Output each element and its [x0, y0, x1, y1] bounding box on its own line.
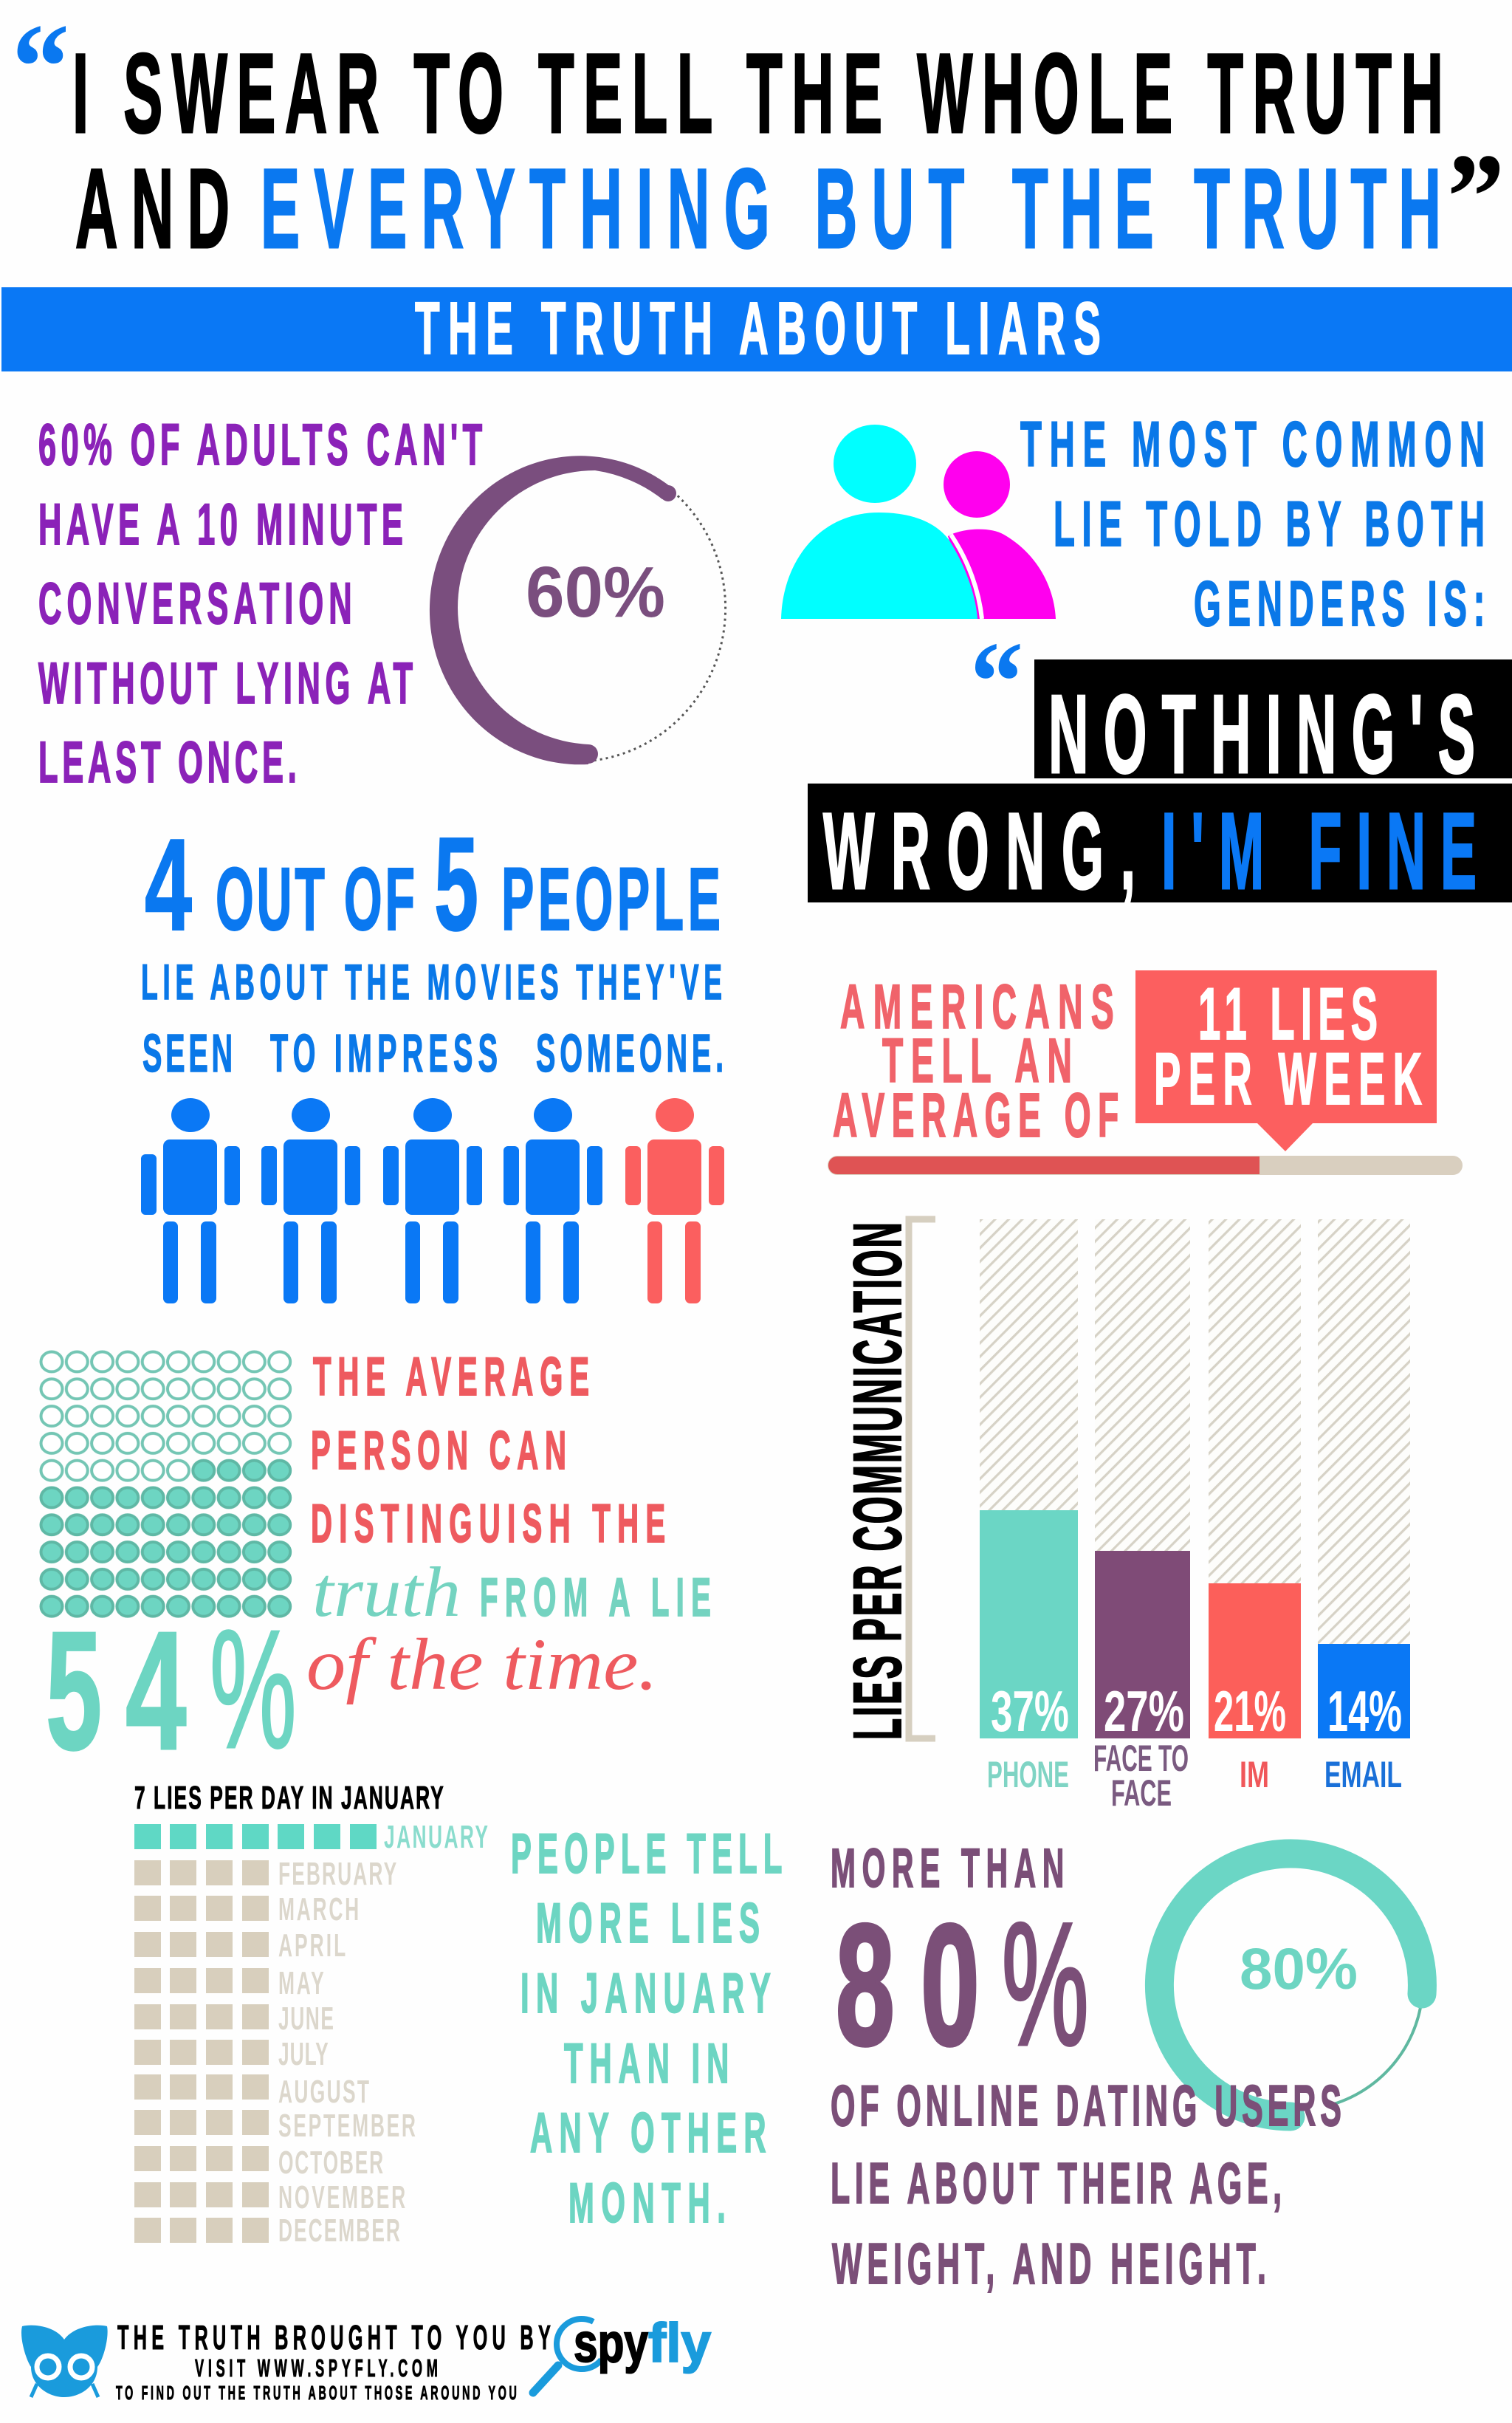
quote: nothing's wrong: I'M FINE	[1161, 790, 1477, 912]
text: americans tell an average of	[833, 973, 1118, 1151]
month labels: JUNE	[278, 2000, 334, 2037]
callout: 11 lies per week	[1135, 970, 1437, 1151]
quote: nothing's wrong	[808, 659, 1512, 912]
subtitle banner: THE TRUTH ABOUT LIARS	[415, 288, 1101, 370]
callout: 11 lies per week: 11 LIES	[1198, 973, 1378, 1055]
bar: phone: 37%	[991, 1679, 1069, 1744]
month labels: JULY	[278, 2035, 329, 2072]
text: americans tell an average of: AVERAGE OF	[833, 1082, 1118, 1151]
quote: nothing's wrong: WRONG,	[823, 790, 1135, 912]
icon: fly mascot	[21, 2326, 108, 2397]
big number: 54 percent: 4	[126, 1597, 186, 1785]
text: 60 percent statement	[38, 411, 482, 795]
text: online dating statement: MORE THAN	[831, 1837, 1064, 1899]
month labels: NOVEMBER	[278, 2179, 405, 2215]
month labels: FEBRUARY	[278, 1855, 396, 1892]
text: brought to you by: VISIT WWW.SPYFLY.COM	[195, 2354, 438, 2382]
bar: face to face	[1093, 1219, 1190, 1814]
text: most common lie intro: THE MOST COMMON	[1020, 408, 1485, 480]
text: average person: FROM A LIE	[480, 1569, 711, 1628]
text: people tell more lies in january: MORE LIES	[536, 1891, 760, 1954]
text: online dating statement: LIE ABOUT THEIR AGE,	[831, 2152, 1282, 2215]
quote: nothing's wrong: NOTHING'S	[1048, 673, 1475, 797]
text: movies statement: SEEN	[142, 1024, 233, 1083]
panel: online dating 80 percent	[831, 1837, 1422, 2296]
subtitle banner	[1, 287, 1512, 371]
text: online dating statement	[831, 1837, 1341, 2296]
bar: email	[1318, 1219, 1410, 1795]
bar: face to face: FACE	[1111, 1772, 1172, 1814]
text: people tell more lies in january: PEOPLE TELL	[511, 1822, 782, 1885]
heading	[145, 811, 721, 959]
heading: OUT OF	[216, 849, 415, 949]
footer	[21, 2312, 711, 2404]
month labels: OCTOBER	[278, 2144, 383, 2181]
title line two: AND	[75, 145, 230, 272]
title line one: I SWEAR TO TELL THE WHOLE TRUTH	[72, 30, 1443, 157]
text: average person: of the time.	[306, 1623, 658, 1705]
text: americans tell an average of: AMERICANS	[840, 973, 1114, 1042]
panel: most common lie	[781, 408, 1512, 912]
progress bar	[828, 1156, 1463, 1175]
text: average person: truth	[312, 1552, 461, 1631]
title line two: EVERYTHING BUT	[261, 145, 964, 272]
icon: person 2	[261, 1098, 360, 1303]
text: most common lie intro	[1020, 408, 1485, 640]
text: most common lie intro: GENDERS IS:	[1194, 568, 1485, 640]
bar: email: EMAIL	[1324, 1754, 1402, 1795]
panel: 54 percent truth detection	[39, 1348, 711, 1785]
text: movies statement: LIE ABOUT THE MOVIES THEY'VE	[141, 953, 722, 1010]
title line two	[75, 145, 1441, 272]
title line two: THE TRUTH	[1012, 145, 1441, 272]
icon: person 5 highlighted	[625, 1098, 724, 1303]
bar: face to face: FACE TO	[1093, 1738, 1189, 1779]
donut value: 60%	[526, 552, 665, 632]
month labels: MARCH	[278, 1891, 359, 1927]
text: online dating statement: OF ONLINE DATING USERS	[831, 2074, 1341, 2138]
row: january	[134, 1818, 488, 1855]
text: brought to you by: TO FIND OUT THE TRUTH ABOUT THOSE AROUND YOU	[116, 2383, 517, 2404]
text: online dating statement: 0	[921, 1888, 980, 2080]
heading: 4	[145, 812, 192, 958]
axis bracket	[909, 1219, 935, 1738]
text: average person: THE AVERAGE	[313, 1348, 589, 1407]
row: january: JANUARY	[384, 1818, 488, 1855]
text: people tell more lies in january: MONTH.	[568, 2171, 726, 2234]
bar: face to face: 27%	[1104, 1679, 1184, 1744]
title	[12, 0, 1505, 272]
month labels: SEPTEMBER	[278, 2107, 416, 2144]
big number: 54 percent	[46, 1595, 297, 1785]
text: people tell more lies in january: ANY OTHER	[530, 2101, 766, 2164]
panel: 11 lies per week	[828, 970, 1463, 1175]
text: movies statement: TO IMPRESS	[270, 1024, 498, 1083]
text: online dating statement: 8	[836, 1888, 895, 2080]
logo: spyfly with magnifying glass: fly	[648, 2312, 711, 2374]
text: online dating statement: %	[1002, 1887, 1089, 2082]
text: 60 percent statement: HAVE A 10 MINUTE	[38, 491, 403, 557]
icon: person 3	[383, 1098, 482, 1303]
axis title: LIES PER COMMUNICATION	[839, 1222, 915, 1740]
closing quote mark: ”	[1447, 128, 1505, 266]
bar: email: 14%	[1327, 1679, 1402, 1744]
text: brought to you by: THE TRUTH BROUGHT TO YOU BY	[117, 2318, 551, 2357]
month labels	[278, 1855, 416, 2249]
text: people tell more lies in january	[511, 1822, 782, 2234]
panel: 4 out of 5 people	[141, 811, 724, 1303]
big number: 54 percent: 5	[46, 1597, 102, 1785]
big number: 54 percent: %	[210, 1595, 297, 1783]
donut chart: 60 percent	[430, 456, 726, 764]
text: people tell more lies in january: IN JANUARY	[520, 1961, 771, 2024]
panel: lies per month chart	[134, 1779, 488, 2249]
donut chart: 80 percent	[1159, 1854, 1422, 2117]
text: 60 percent statement: 60% OF ADULTS CAN'T	[38, 411, 482, 477]
heading: 5	[434, 811, 478, 959]
text: 60 percent statement: CONVERSATION	[38, 570, 352, 636]
text: 60 percent statement: WITHOUT LYING AT	[38, 650, 413, 716]
month labels: APRIL	[278, 1927, 346, 1964]
quote mark: “	[970, 619, 1023, 745]
logo: spyfly with magnifying glass: spy	[574, 2312, 648, 2374]
bar: im: IM	[1240, 1754, 1269, 1795]
bar: im: 21%	[1214, 1679, 1286, 1744]
text: 60 percent statement: LEAST ONCE.	[38, 729, 297, 795]
month labels: AUGUST	[278, 2073, 369, 2110]
text: average person: PERSON CAN	[311, 1422, 566, 1481]
icon: person 1	[141, 1098, 240, 1303]
text: movies statement	[141, 953, 724, 1083]
icon row: five people	[141, 1098, 724, 1303]
icon: two people	[781, 425, 1056, 619]
bar: phone: PHONE	[987, 1754, 1069, 1795]
text: online dating statement: WEIGHT, AND HEIGHT.	[832, 2232, 1266, 2296]
bar: im	[1209, 1219, 1301, 1795]
panel: 60 percent of adults	[38, 411, 726, 795]
callout: 11 lies per week: PER WEEK	[1154, 1038, 1422, 1120]
donut value: 80%	[1240, 1936, 1358, 2001]
text: average person	[306, 1348, 711, 1705]
text: brought to you by	[116, 2318, 551, 2404]
dot grid: 54 of 100 filled	[39, 1348, 292, 1620]
text: average person: DISTINGUISH THE	[311, 1495, 665, 1554]
bar: phone	[980, 1219, 1078, 1795]
logo: spyfly with magnifying glass	[533, 2312, 711, 2393]
opening quote mark: “	[12, 0, 69, 136]
text: most common lie intro: LIE TOLD BY BOTH	[1054, 488, 1485, 560]
panel: lies per communication bar chart	[839, 1219, 1410, 1814]
rows: february to december squares	[134, 1860, 269, 2243]
text: people tell more lies in january: THAN IN	[564, 2032, 729, 2094]
month labels: DECEMBER	[278, 2212, 400, 2249]
heading: PEOPLE	[501, 849, 721, 949]
text: movies statement: SOMEONE.	[536, 1024, 724, 1083]
icon: person 4	[504, 1098, 602, 1303]
chart title: 7 LIES PER DAY IN JANUARY	[134, 1779, 444, 1816]
text: americans tell an average of: TELL AN	[882, 1027, 1072, 1096]
month labels: MAY	[278, 1964, 324, 2001]
